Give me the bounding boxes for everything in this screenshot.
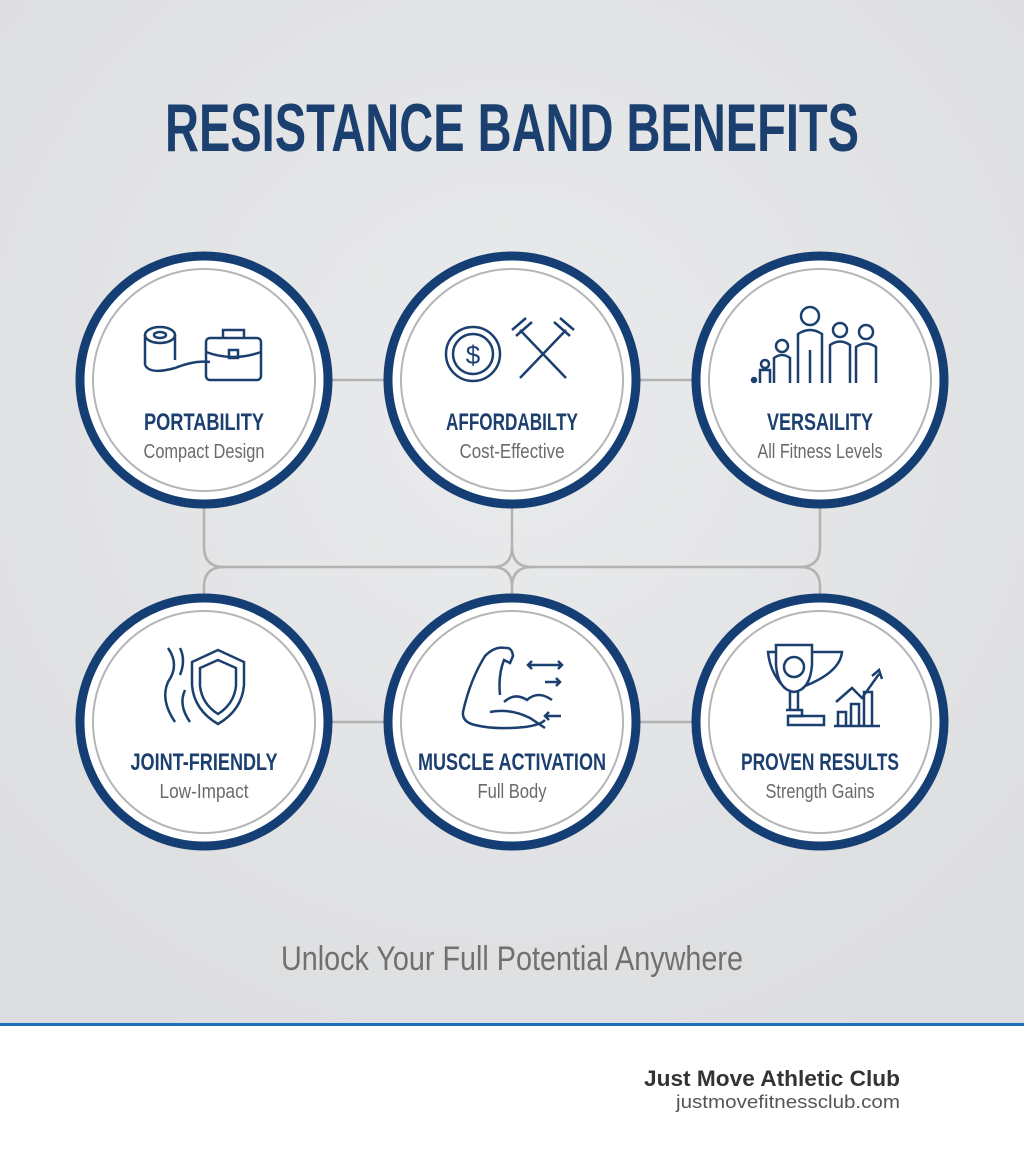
text block: Compact Design bbox=[144, 441, 264, 463]
panel: affordability bbox=[388, 256, 636, 504]
heading: AFFORDABILTY bbox=[446, 409, 578, 436]
footer bbox=[0, 1023, 1024, 1154]
text block: Strength Gains bbox=[766, 781, 874, 803]
panel: joint-friendly bbox=[80, 598, 328, 846]
icon: band roll and briefcase bbox=[145, 327, 261, 380]
text block: Low-Impact bbox=[160, 781, 249, 803]
heading: MUSCLE ACTIVATION bbox=[418, 749, 606, 776]
icon: trophy and chart bbox=[768, 645, 882, 726]
heading: VERSAILITY bbox=[767, 409, 873, 436]
icon: joint and shield bbox=[165, 648, 244, 724]
panel: proven results bbox=[696, 598, 944, 846]
icon: family bbox=[752, 307, 876, 383]
heading: PROVEN RESULTS bbox=[741, 749, 899, 776]
panel: muscle activation bbox=[388, 598, 636, 846]
panel: portability bbox=[80, 256, 328, 504]
tagline: Unlock Your Full Potential Anywhere bbox=[281, 940, 743, 978]
text block: Full Body bbox=[478, 781, 546, 803]
footer brand: Just Move Athletic Club bbox=[644, 1066, 900, 1091]
panel: versatility bbox=[696, 256, 944, 504]
footer url: justmovefitnessclub.com bbox=[675, 1092, 900, 1112]
heading: PORTABILITY bbox=[144, 409, 264, 436]
icon: flexed arm bbox=[463, 648, 562, 728]
connectors bbox=[204, 380, 820, 722]
heading: JOINT-FRIENDLY bbox=[130, 749, 278, 776]
icon: coin and dumbbells: $ bbox=[466, 340, 481, 370]
text block: Cost-Effective bbox=[460, 441, 564, 463]
icon: coin and dumbbells bbox=[446, 318, 574, 381]
text block: All Fitness Levels bbox=[758, 441, 882, 463]
